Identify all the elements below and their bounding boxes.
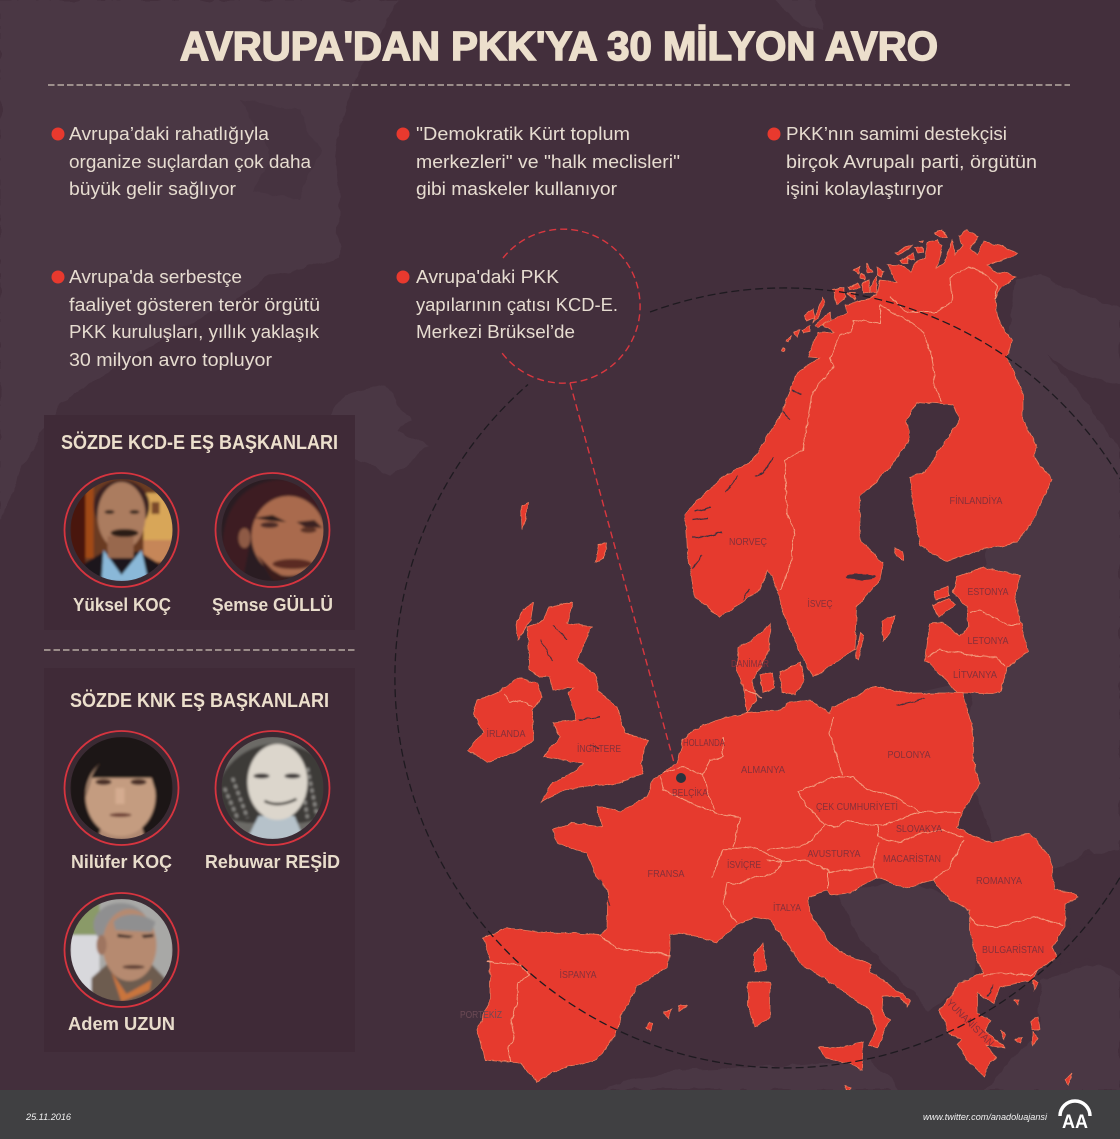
Scandinavia xyxy=(685,230,1052,677)
Denmark xyxy=(737,623,770,713)
name: Nilüfer Koç: Nilüfer KOÇ xyxy=(71,852,172,872)
name: Rebuwar Reşid: Rebuwar REŞİD xyxy=(205,852,340,872)
country labels: İSVEÇ xyxy=(808,597,832,610)
text block: KCD-E umbrella: yapılarının çatısı KCD-E. xyxy=(416,294,618,315)
text block: 30 million: faaliyet gösteren terör örgütü xyxy=(69,294,320,315)
heading: KCD-E: SÖZDE KCD-E EŞ BAŞKANLARI xyxy=(61,431,338,454)
country labels: İSVİÇRE xyxy=(727,858,761,871)
portrait: Rebuwar Reşid xyxy=(216,731,330,845)
panel: KCD-E co-chairs xyxy=(44,415,355,630)
country labels: FRANSA xyxy=(648,869,685,880)
Baltic states xyxy=(925,568,1028,693)
coastal fjords and lakes xyxy=(540,390,1015,1000)
text block: masks: "Demokratik Kürt toplum xyxy=(416,123,630,144)
text block: organised crime income: Avrupa’daki rahatlığıyla xyxy=(69,123,270,144)
text block: european parties: birçok Avrupalı parti, örgütün xyxy=(786,151,1037,172)
Balearics, Greek islands and small islands xyxy=(646,980,1072,1092)
text block: 30 million xyxy=(52,266,320,370)
Ireland xyxy=(468,678,542,763)
country labels: İTALYA xyxy=(773,901,801,914)
marker: Brussels xyxy=(676,773,686,783)
title: AVRUPA'DAN PKK'YA 30 MİLYON AVRO xyxy=(180,23,938,69)
portrait: Yüksel Koç xyxy=(64,473,178,587)
country labels: LETONYA xyxy=(968,636,1009,647)
text block: KCD-E umbrella: Avrupa'daki PKK xyxy=(416,266,560,287)
country labels: ÇEK CUMHURİYETİ xyxy=(816,800,898,813)
name: Şemse Güllü: Şemse GÜLLÜ xyxy=(212,595,333,615)
big dashed circle: PKK presence in Europe xyxy=(395,288,1120,1068)
text block: masks: gibi maskeler kullanıyor xyxy=(416,178,617,199)
text block: 30 million: 30 milyon avro topluyor xyxy=(69,349,272,370)
country labels: YUNANİSTAN xyxy=(944,996,997,1049)
portrait: Şemse Güllü xyxy=(216,473,330,587)
text block: european parties xyxy=(768,123,1037,199)
social link: www.twitter.com/anadoluajansi xyxy=(923,1112,1048,1123)
country labels: AVUSTURYA xyxy=(808,849,861,860)
date: 25.11.2016 xyxy=(25,1112,71,1122)
panel: KNK co-chairs xyxy=(64,689,340,1049)
text block: organised crime income: büyük gelir sağlıyor xyxy=(69,178,236,199)
text block: masks xyxy=(396,123,680,199)
text block: KCD-E umbrella xyxy=(396,266,618,342)
country labels: ROMANYA xyxy=(976,876,1022,887)
text block: 30 million: Avrupa'da serbestçe xyxy=(69,266,242,287)
country labels: SLOVAKYA xyxy=(896,824,942,835)
portrait: Nilüfer Koç xyxy=(64,731,178,845)
country labels: LİTVANYA xyxy=(953,668,997,681)
country labels: PORTEKİZ xyxy=(460,1008,502,1021)
icon: Anadolu Agency logo xyxy=(1060,1101,1090,1133)
portrait: Adem Uzun xyxy=(64,893,178,1007)
country labels: ESTONYA xyxy=(968,587,1009,598)
country labels: POLONYA xyxy=(888,750,931,761)
panel divider xyxy=(44,649,355,651)
country labels xyxy=(460,494,1044,1049)
country labels: NORVEÇ xyxy=(729,537,767,548)
text block: european parties: işini kolaylaştırıyor xyxy=(786,178,943,199)
icon: Anadolu Agency logo: AA xyxy=(1062,1112,1088,1133)
country labels: DANİMAR xyxy=(731,657,769,670)
country labels: İRLANDA xyxy=(486,727,526,740)
country labels: İSPANYA xyxy=(560,968,597,981)
Corsica and Sardinia xyxy=(748,943,770,1027)
country labels: ALMANYA xyxy=(741,765,785,776)
country borders xyxy=(487,267,1063,1062)
country labels: FİNLANDİYA xyxy=(950,494,1003,507)
footer bar xyxy=(0,1090,1120,1139)
name: Yüksel Koç: Yüksel KOÇ xyxy=(73,595,171,615)
text block: organised crime income: organize suçlardan çok daha xyxy=(69,151,312,172)
heading: KNK: SÖZDE KNK EŞ BAŞKANLARI xyxy=(70,689,329,712)
country labels: İNGİLTERE xyxy=(577,742,621,755)
country labels: BELÇİKA xyxy=(672,786,708,799)
Norwegian islands xyxy=(785,230,947,343)
map of Europe xyxy=(172,230,1078,1092)
text block: masks: merkezleri" ve "halk meclisleri" xyxy=(416,151,680,172)
red dashed callout circle around Brussels note xyxy=(502,229,676,770)
name: Adem Uzun: Adem UZUN xyxy=(68,1014,175,1034)
text block: 30 million: PKK kuruluşları, yıllık yaklaşık xyxy=(69,321,320,342)
country labels: MACARİSTAN xyxy=(883,852,941,865)
Great Britain xyxy=(527,603,648,802)
text block: organised crime income xyxy=(52,123,312,199)
top dashed divider xyxy=(48,84,1070,86)
Mainland Europe xyxy=(477,687,1078,1082)
country labels: BULGARİSTAN xyxy=(982,943,1044,956)
text block: KCD-E umbrella: Merkezi Brüksel’de xyxy=(416,321,575,342)
Sicily xyxy=(818,1042,863,1070)
Gotland, Oland, Aland xyxy=(855,549,904,660)
text block: european parties: PKK’nın samimi destekçisi xyxy=(786,123,1007,144)
country labels: HOLLANDA xyxy=(683,738,725,749)
